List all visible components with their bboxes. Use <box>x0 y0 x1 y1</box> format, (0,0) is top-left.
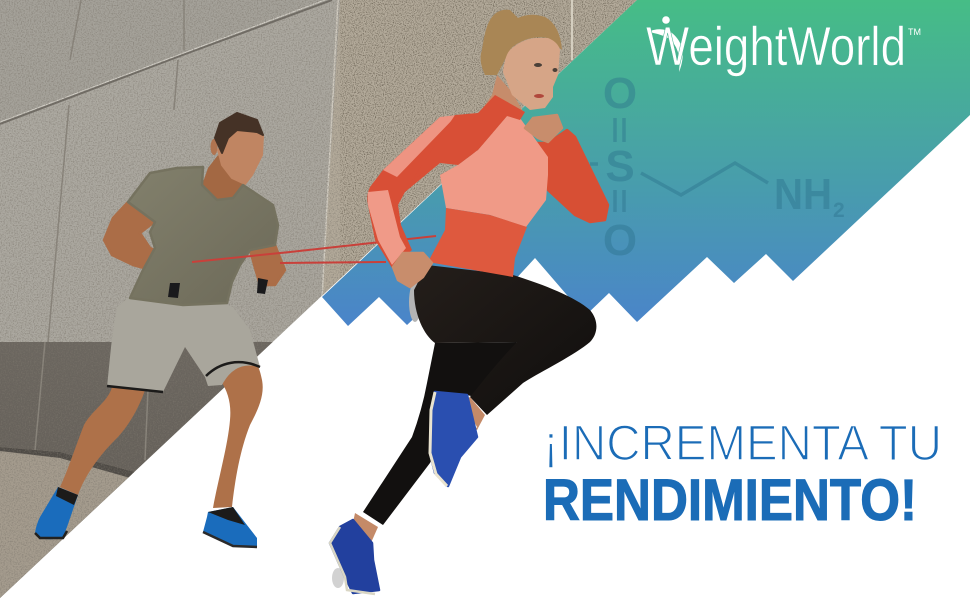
jacket: waistband <box>428 208 527 277</box>
jacket: upper sleeve stripe <box>383 115 457 177</box>
woman running <box>330 10 608 594</box>
man: arms and hands <box>104 202 285 285</box>
man: shirt <box>128 167 278 305</box>
man: shorts <box>107 298 260 392</box>
woman: head <box>478 10 562 115</box>
woman: lower shoe <box>330 513 379 594</box>
headline line 2: RENDIMIENTO! <box>543 468 917 533</box>
photo background: concrete wall <box>0 0 640 600</box>
jacket: left sleeve <box>367 116 507 268</box>
jacket: pink torso <box>440 116 548 227</box>
logo: WeightWorld: WeightWorld <box>646 15 906 77</box>
woman: rear leg <box>363 342 517 525</box>
resistance band <box>192 236 436 263</box>
man: band handles <box>168 278 268 298</box>
molecule watermark: S <box>605 142 635 191</box>
woman: raised shoe <box>430 392 485 486</box>
woman: fists <box>393 115 562 287</box>
man with resistance band <box>35 113 436 547</box>
logo: WeightWorld: TM <box>908 27 921 37</box>
woman: hip highlight <box>409 282 421 322</box>
man: shoes <box>35 487 257 547</box>
gradient mountain panel <box>322 0 970 326</box>
molecule watermark: O <box>603 69 637 118</box>
jacket: right sleeve <box>531 130 608 222</box>
molecule watermark: O <box>603 216 637 265</box>
jacket: collar <box>412 95 525 180</box>
headline line 1: ¡INCREMENTA TU <box>543 415 942 471</box>
molecule watermark: NH <box>774 170 832 219</box>
woman: jacket <box>367 95 608 277</box>
headline <box>543 415 942 533</box>
man: legs <box>60 362 263 508</box>
jacket: forearm panel <box>368 190 406 265</box>
molecule watermark: 2 <box>833 199 845 222</box>
molecule watermark <box>590 69 845 265</box>
man: head <box>202 113 263 200</box>
woman: front thigh and knee <box>414 265 596 415</box>
